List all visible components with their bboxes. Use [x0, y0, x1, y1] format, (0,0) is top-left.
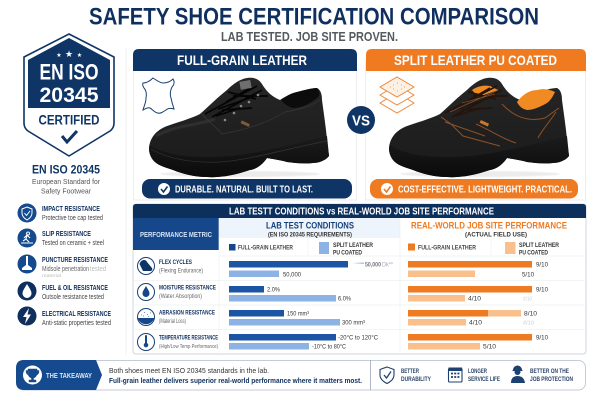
split leather header: SPLIT LEATHER PU COATED — [394, 52, 557, 68]
benefit: durability — [380, 367, 432, 384]
table header: LAB TESTT CONDITIONS vs REAL-WORLD JOB SITE PERFORMANCE — [229, 206, 494, 218]
impact resistance: IMPACT RESISTANCE — [42, 204, 100, 213]
takeaway bar — [16, 360, 586, 390]
split leather header — [366, 49, 586, 71]
benefit: service life: LONGER — [468, 368, 487, 375]
lab legend: PU COATED — [333, 250, 362, 256]
full-grain shoe — [149, 78, 329, 177]
puncture resistance: PUNCTURE RESISTANCE — [42, 255, 108, 264]
electrical resistance — [18, 306, 111, 327]
badge stars: ★ — [65, 49, 73, 59]
row: moisture resistance: MOISTURE RESISTANCE — [159, 284, 216, 292]
row: abrasion resistance: 300 mm³ — [342, 320, 366, 326]
row: moisture resistance: 6.0% — [338, 296, 351, 302]
column divider — [125, 48, 127, 355]
full-grain header: FULL-GRAIN LEATHER — [177, 52, 307, 68]
badge caption: European Standard for — [32, 177, 100, 186]
lab test header — [219, 218, 400, 238]
lab legend: SPLIT LEATHER — [333, 242, 373, 249]
certification badge: ★ — [77, 52, 82, 59]
electrical resistance: ELECTRICAL RESISTANCE — [42, 309, 111, 318]
row: moisture resistance: #/10 — [523, 296, 532, 302]
real-world legend: SPLIT LEATHER — [519, 242, 559, 249]
lab bars — [229, 286, 264, 292]
benefit: job protection: JOB PROTECTION — [530, 376, 573, 383]
takeaway label: THE TAKEAWAY — [46, 371, 92, 380]
takeaway text: Full-grain leather delivers superior real-world performance where it matters most. — [109, 376, 362, 385]
row: flex cycles: 5/10 — [522, 272, 534, 278]
full-grain header — [133, 49, 357, 71]
takeaway text: Both shoes meet EN ISO 20345 standards in the lab. — [109, 366, 269, 375]
fuel and oil resistance: FUEL & OIL RESISTANCE — [42, 283, 108, 292]
row: flex cycles: 9/10 — [536, 262, 548, 268]
benefit: job protection: BETTER ON THE — [530, 368, 569, 375]
row: flex cycles — [138, 258, 548, 278]
takeaway label — [16, 360, 102, 390]
full-grain pill: DURABLE. NATURAL. BUILT TO LAST. — [175, 184, 313, 196]
row: abrasion resistance: ABRASION RESISTANCE — [159, 310, 215, 316]
row: temperature resistance: -10°C to 80°C — [312, 342, 346, 350]
row: temperature resistance — [138, 334, 548, 350]
lab bars — [229, 310, 284, 316]
fuel and oil resistance — [18, 282, 108, 301]
row: temperature resistance: TEMPERATURE RESISTANCE — [159, 334, 218, 342]
split leather pill — [370, 179, 578, 198]
icon: leather hide — [143, 78, 174, 113]
vs badge: VS — [352, 112, 370, 130]
table header — [133, 204, 586, 218]
row: temperature resistance: -20°C to 120°C — [338, 334, 378, 342]
field bars — [408, 261, 532, 268]
badge check — [62, 131, 77, 142]
real-world legend: FULL-GRAIN LEATHER — [418, 244, 476, 252]
certification badge: ★ — [56, 52, 62, 59]
field bars — [408, 334, 532, 340]
row: moisture resistance: 9/10 — [536, 286, 548, 294]
puncture resistance: Midsole penetration — [42, 266, 89, 273]
vs badge — [347, 106, 375, 134]
benefit: durability: BETTER — [401, 368, 419, 375]
row: moisture resistance: (Water Absorption) — [159, 294, 202, 300]
puncture resistance: material — [42, 273, 61, 278]
takeaway text — [109, 366, 362, 385]
slip resistance: Tested on ceramic + steel — [42, 240, 104, 247]
badge text: EN ISO — [40, 60, 98, 84]
puncture resistance — [18, 254, 108, 278]
performance metric header — [133, 218, 219, 250]
lab legend — [229, 242, 373, 256]
performance metric header: PERFORMANCE METRIC — [140, 230, 212, 239]
icon: layered material — [380, 77, 414, 113]
row: abrasion resistance: 150 mm³ — [287, 310, 310, 318]
badge caption: Safety Footwear — [41, 186, 91, 196]
real-world legend: PU COATED — [519, 250, 548, 256]
row: moisture resistance: 4/10 — [468, 296, 481, 302]
impact resistance: Protective toe cap tested — [42, 215, 103, 222]
row: temperature resistance: 9/10 — [536, 334, 548, 342]
row: temperature resistance: 5/10 — [483, 344, 496, 350]
real-world header: REAL-WORLD JOB SITE PERFORMANCE — [411, 220, 567, 232]
real-world legend — [408, 242, 559, 256]
slip resistance — [18, 228, 104, 248]
fuel and oil resistance: Outsole resistance tested — [42, 294, 104, 301]
field bars — [408, 286, 532, 292]
subtitle: LAB TESTED. JOB SITE PROVEN. — [221, 30, 398, 44]
table grid lines — [133, 218, 586, 354]
row: abrasion resistance: #/10 — [523, 320, 534, 326]
lab bars — [229, 261, 348, 268]
split leather shoe — [389, 78, 569, 177]
lab bars — [229, 334, 336, 340]
badge caption: EN ISO 20345 — [32, 164, 101, 176]
certification badge — [24, 34, 114, 156]
comparison table — [133, 204, 586, 354]
badge caption — [32, 164, 101, 196]
panel: full-grain leather — [133, 49, 357, 200]
benefit: job protection — [511, 366, 573, 383]
row: temperature resistance: (High/Low Temp Performance) — [159, 344, 218, 350]
benefit: service life: SERVICE LIFE — [468, 376, 500, 383]
certification badge: CERTIFIED — [38, 112, 100, 128]
impact resistance — [18, 204, 103, 222]
feature list — [18, 204, 111, 327]
lab legend: FULL-GRAIN LEATHER — [238, 244, 293, 252]
field bars — [408, 310, 521, 316]
row: flex cycles: Dk** — [382, 262, 394, 268]
electrical resistance: Anti-static properties tested — [42, 320, 111, 327]
row: flex cycles: FLEX CYCLES — [159, 259, 192, 266]
full-grain pill — [142, 179, 352, 198]
row: abrasion resistance: (Material Loss) — [159, 319, 186, 325]
real-world header — [411, 220, 567, 238]
row: flex cycles: 50,000 — [365, 262, 382, 268]
puncture resistance: tested — [90, 266, 106, 273]
row: moisture resistance — [138, 284, 548, 302]
panel: split leather pu coated — [366, 49, 586, 200]
benefit: durability: DURABILITY — [401, 376, 432, 383]
row: moisture resistance: 2.0% — [267, 286, 280, 294]
slip resistance: SLIP RESISTANCE — [42, 229, 91, 238]
real-world header: (ACTUAL FIELD USE) — [465, 232, 527, 238]
lab test header: (EN ISO 20345 REQUIREMENTS) — [268, 232, 352, 238]
row: abrasion resistance: 8/10 — [524, 310, 537, 318]
lab test header: LAB TEST CONDITIONS — [266, 220, 354, 232]
row: flex cycles: 50,000 — [283, 272, 301, 278]
row: flex cycles: (Flexing Endurance) — [159, 268, 203, 274]
certification badge: 20345 — [40, 84, 99, 107]
benefit: service life — [448, 368, 500, 383]
row: abrasion resistance: 4/10 — [469, 320, 482, 326]
row: abrasion resistance — [138, 308, 537, 326]
